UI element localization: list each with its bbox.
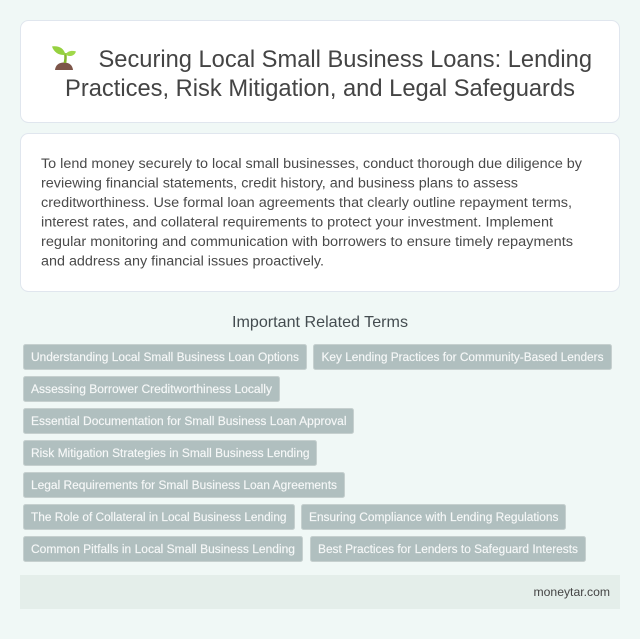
tag: risk mitigation: Risk Mitigation Strategies in Small Business Lending (31, 446, 310, 460)
tag: loan options (24, 344, 306, 370)
footer bar (20, 575, 620, 609)
tag: key lending practices: Key Lending Practices for Community-Based Lenders (322, 350, 604, 364)
text block: summary: interest rates, and collateral requirements to protect your investment. Implement (41, 214, 553, 230)
icon: seedling (52, 46, 76, 70)
panel: title card (20, 20, 620, 122)
text block: summary: To lend money securely to local small businesses, conduct thorough due diligence by (41, 156, 583, 172)
tag: documentation: Essential Documentation for Small Business Loan Approval (31, 414, 346, 428)
text block: summary: regular monitoring and communication with borrowers to ensure timely repayments (41, 234, 573, 250)
heading: related terms: Important Related Terms (232, 314, 408, 331)
tag: best practices (310, 536, 586, 562)
tag: collateral: The Role of Collateral in Local Business Lending (31, 510, 286, 524)
tag: loan options: Understanding Local Small Business Loan Options (31, 350, 299, 364)
text block: summary: creditworthiness. Use formal loan agreements that clearly outline repayment terms, (41, 195, 572, 211)
text block: summary: and address any financial issues proactively. (41, 254, 324, 270)
title: Securing Local Small Business Loans: Lending (98, 46, 592, 73)
tag: best practices: Best Practices for Lenders to Safeguard Interests (318, 542, 578, 556)
tag: creditworthiness: Assessing Borrower Creditworthiness Locally (31, 382, 273, 396)
panel: summary paragraph (20, 134, 620, 292)
tag: creditworthiness (24, 376, 280, 402)
tag: key lending practices (314, 344, 612, 370)
text block: summary (41, 156, 583, 270)
title: Practices, Risk Mitigation, and Legal Safeguards (65, 75, 575, 102)
tag: legal requirements (24, 472, 344, 498)
title (65, 46, 592, 102)
footer: site name: moneytar.com (534, 585, 610, 599)
tag: pitfalls (24, 536, 302, 562)
tag: compliance: Ensuring Compliance with Lending Regulations (309, 510, 558, 524)
tag: risk mitigation (24, 440, 316, 466)
tag: legal requirements: Legal Requirements for Small Business Loan Agreements (31, 478, 337, 492)
tag: pitfalls: Common Pitfalls in Local Small Business Lending (31, 542, 295, 556)
tag: collateral (24, 504, 294, 530)
tag list: related terms (24, 344, 612, 562)
tag: documentation (24, 408, 354, 434)
tag: compliance (302, 504, 566, 530)
text block: summary: reviewing financial statements, credit history, and business plans to assess (41, 176, 518, 192)
